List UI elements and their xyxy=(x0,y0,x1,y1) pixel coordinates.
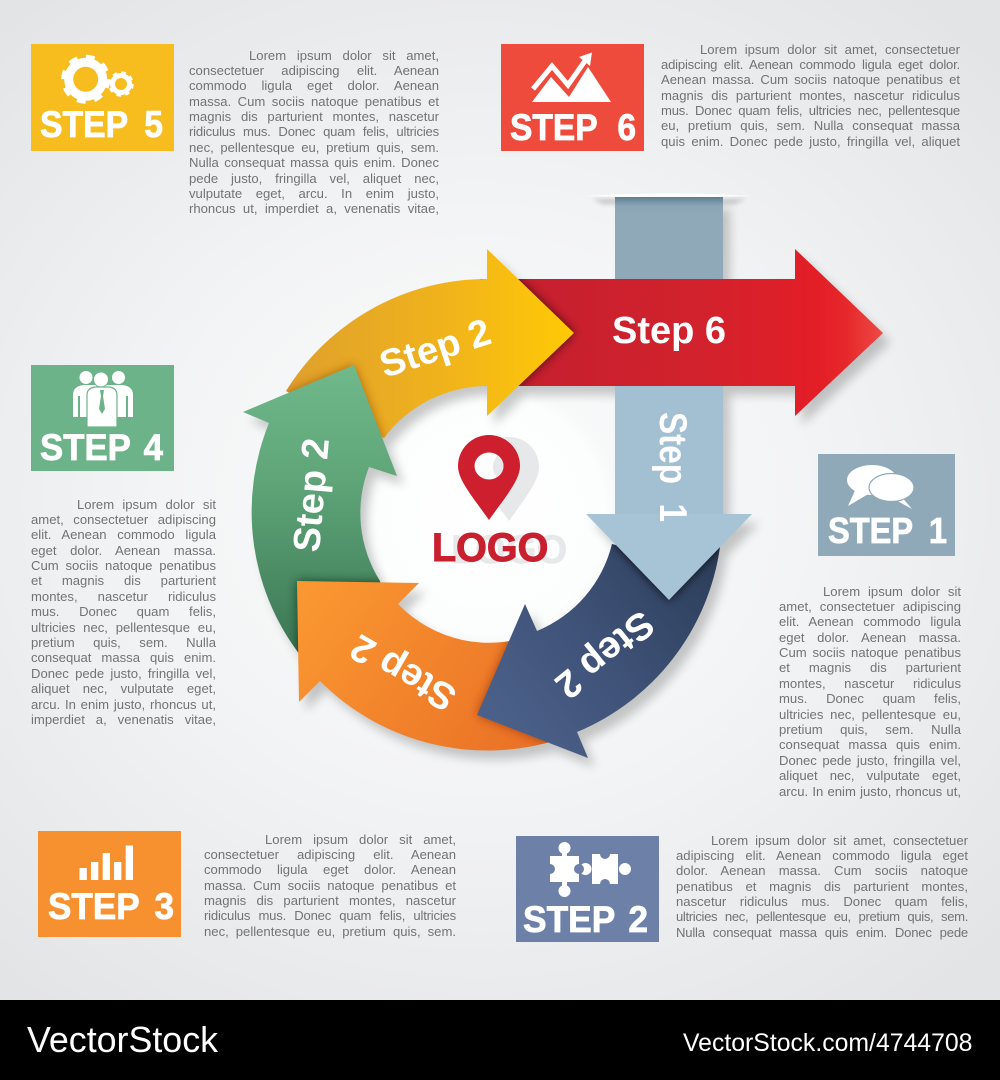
label: step 1: Step 1 xyxy=(651,412,694,522)
text block: step 1: Cum sociis natoque penatibus xyxy=(779,645,961,660)
text block: step 1: consequat massa quis enim. xyxy=(779,737,961,752)
text block: step 1: arcu. In enim justo, rhoncus ut, xyxy=(779,784,961,799)
text block: step 2: dolor. Aenean massa. Cum sociis natoque xyxy=(676,863,968,878)
text block: step 4: imperdiet a, venenatis vitae, xyxy=(31,712,216,727)
footer url: VectorStock.com/4744708 xyxy=(683,1030,972,1057)
text block: step 6: magnis dis parturient montes, nascetur ridiculus xyxy=(661,88,960,103)
text block: step 1: amet, consectetuer adipiscing xyxy=(779,599,961,614)
label: STEP 3 xyxy=(48,886,174,927)
icon: team xyxy=(73,371,133,427)
text block: step 4: consequat massa quis enim. xyxy=(31,650,216,665)
logo text: LOGO xyxy=(451,528,567,572)
text block: step 1: Lorem ipsum dolor sit xyxy=(823,584,961,598)
panel: step 5 badge xyxy=(31,44,174,151)
arrow: step 1 head xyxy=(586,412,752,600)
text block: step 3: ridiculus mus. Donec quam felis, ultricies xyxy=(204,908,456,923)
panel: step 3 badge xyxy=(38,831,181,937)
label: step 2 yellow: Step 2 xyxy=(375,311,496,387)
text block: step 5: rhoncus ut, imperdiet a, venenatis vitae, xyxy=(189,201,439,216)
text block: step 3: Lorem ipsum dolor sit amet, xyxy=(265,832,456,846)
text block: step 5: magnis dis parturient montes, nascetur xyxy=(189,109,439,124)
text block: step 1: eget dolor. Aenean massa. xyxy=(779,630,961,645)
footer brand: VectorStock xyxy=(27,1020,218,1060)
text block: step 3: massa. Cum sociis natoque penatibus et xyxy=(204,878,456,893)
label: step 2 green: Step 2 xyxy=(286,436,338,554)
text block: step 4: aliquet nec, vulputate eget, xyxy=(31,681,216,696)
text block: step 3: commodo ligula eget dolor. Aenean xyxy=(204,862,456,877)
icon: growth chart xyxy=(532,52,611,102)
text block: step 1: montes, nascetur ridiculus xyxy=(779,676,961,691)
text block: step 6: Aenean massa. Cum sociis natoque penatibus et xyxy=(661,72,960,87)
logo xyxy=(432,435,567,572)
icon: map pin xyxy=(458,435,539,521)
text block: step 1: Donec pede justo, fringilla vel, xyxy=(779,753,961,768)
text block: step 5: Lorem ipsum dolor sit amet, xyxy=(249,48,439,62)
text block: step 4: elit. Aenean commodo ligula xyxy=(31,527,216,542)
text block: step 4: eget dolor. Aenean massa. xyxy=(31,543,216,558)
text block: step 6 xyxy=(661,42,960,149)
arrow: step 6 xyxy=(480,249,883,416)
text block: step 2: Lorem ipsum dolor sit amet, consectetuer xyxy=(711,832,968,848)
text block: step 1: pretium quis, sem. Nulla xyxy=(779,722,961,737)
panel: step 6 badge xyxy=(501,44,644,151)
label: step 6: Step 6 xyxy=(612,310,726,352)
label: STEP 1 xyxy=(828,510,947,551)
text block: step 1: et magnis dis parturient xyxy=(779,660,961,675)
text block: step 1: mus. Donec quam felis, xyxy=(779,691,961,706)
text block: step 5: Nulla consequat massa quis enim. Donec xyxy=(189,155,439,170)
text block: step 2: Nulla consequat massa quis enim. Donec pede xyxy=(676,925,968,940)
icon: puzzle pieces xyxy=(545,842,631,897)
icon: gears xyxy=(64,58,132,101)
text block: step 3: consectetuer adipiscing elit. Aenean xyxy=(204,847,456,862)
text block: step 6: quis enim. Donec pede justo, fringilla vel, aliquet xyxy=(661,134,960,149)
text block: step 3 xyxy=(204,832,456,939)
arrow: step 2 navy xyxy=(477,544,720,758)
text block: step 4 xyxy=(31,496,216,727)
label: STEP 6 xyxy=(510,107,636,148)
text block: step 1 xyxy=(779,584,961,799)
text block: step 5: consectetuer adipiscing elit. Aenean xyxy=(189,63,439,78)
label: STEP 2 xyxy=(523,899,648,940)
label: step 2 orange: Step 2 xyxy=(344,625,463,719)
text block: step 4: et magnis dis parturient xyxy=(31,573,216,588)
panel: step 4 badge xyxy=(31,365,174,471)
text block: step 4: Donec pede justo, fringilla vel, xyxy=(31,666,216,681)
text block: step 6: adipiscing elit. Aenean commodo ligula eget dolor. xyxy=(661,57,960,72)
logo text: LOGO xyxy=(432,526,548,570)
panel: step 2 badge xyxy=(516,836,659,942)
text block: step 2: adipiscing elit. Aenean commodo ligula eget xyxy=(676,848,968,863)
text block: step 4: Cum sociis natoque penatibus xyxy=(31,558,216,573)
text block: step 2: penatibus et magnis dis parturient montes, xyxy=(676,879,968,894)
text block: step 4: ultricies nec, pellentesque eu, xyxy=(31,620,216,635)
arrow: step 2 orange xyxy=(297,581,560,750)
text block: step 1: elit. Aenean commodo ligula xyxy=(779,614,961,629)
text block: step 6: mus. Donec quam felis, ultricies nec, pellentesque xyxy=(661,103,960,118)
label: STEP 5 xyxy=(40,104,163,145)
text block: step 3: magnis dis parturient montes, nascetur xyxy=(204,893,456,908)
text block: step 2 xyxy=(676,832,968,940)
label: STEP 4 xyxy=(40,427,163,468)
arrow: step 2 yellow xyxy=(286,249,574,438)
text block: step 4: pretium quis, sem. Nulla xyxy=(31,635,216,650)
text block: step 2: nascetur ridiculus mus. Donec quam felis, xyxy=(676,894,968,909)
text block: step 5: ridiculus mus. Donec quam felis, ultricies xyxy=(189,124,439,139)
text block: step 5: vulputate eget, arcu. In enim justo, xyxy=(189,186,439,201)
text block: step 5 xyxy=(189,48,439,216)
text block: step 1: aliquet nec, vulputate eget, xyxy=(779,768,961,783)
label: step 2 navy: Step 2 xyxy=(547,602,662,706)
text block: step 5: commodo ligula eget dolor. Aenean xyxy=(189,78,439,93)
text block: step 6: eu, pretium quis, sem. Nulla consequat massa xyxy=(661,118,960,133)
text block: step 4: mus. Donec quam felis, xyxy=(31,604,216,619)
text block: step 4: amet, consectetuer adipiscing xyxy=(31,512,216,527)
icon: bar chart xyxy=(80,846,133,880)
text block: step 4: Lorem ipsum dolor sit xyxy=(77,496,216,512)
icon: speech bubbles xyxy=(847,465,914,509)
text block: step 1: ultricies nec, pellentesque eu, xyxy=(779,707,961,722)
text block: step 4: montes, nascetur ridiculus xyxy=(31,589,216,604)
ribbon slot xyxy=(584,194,752,204)
text block: step 3: nec, pellentesque eu, pretium quis, sem. xyxy=(204,924,456,939)
text block: step 4: arcu. In enim justo, rhoncus ut, xyxy=(31,697,216,712)
arrow: step 2 green xyxy=(243,365,397,653)
text block: step 6: Lorem ipsum dolor sit amet, consectetuer xyxy=(700,42,960,56)
text block: step 5: pede justo, fringilla vel, aliquet nec, xyxy=(189,171,439,186)
arrow: step 1 ribbon xyxy=(615,197,723,516)
text block: step 5: massa. Cum sociis natoque penatibus et xyxy=(189,94,439,109)
text block: step 2: ultricies nec, pellentesque eu, pretium quis, sem. xyxy=(676,909,968,924)
text block: step 5: nec, pellentesque eu, pretium quis, sem. xyxy=(189,140,439,155)
panel: step 1 badge xyxy=(818,454,955,556)
